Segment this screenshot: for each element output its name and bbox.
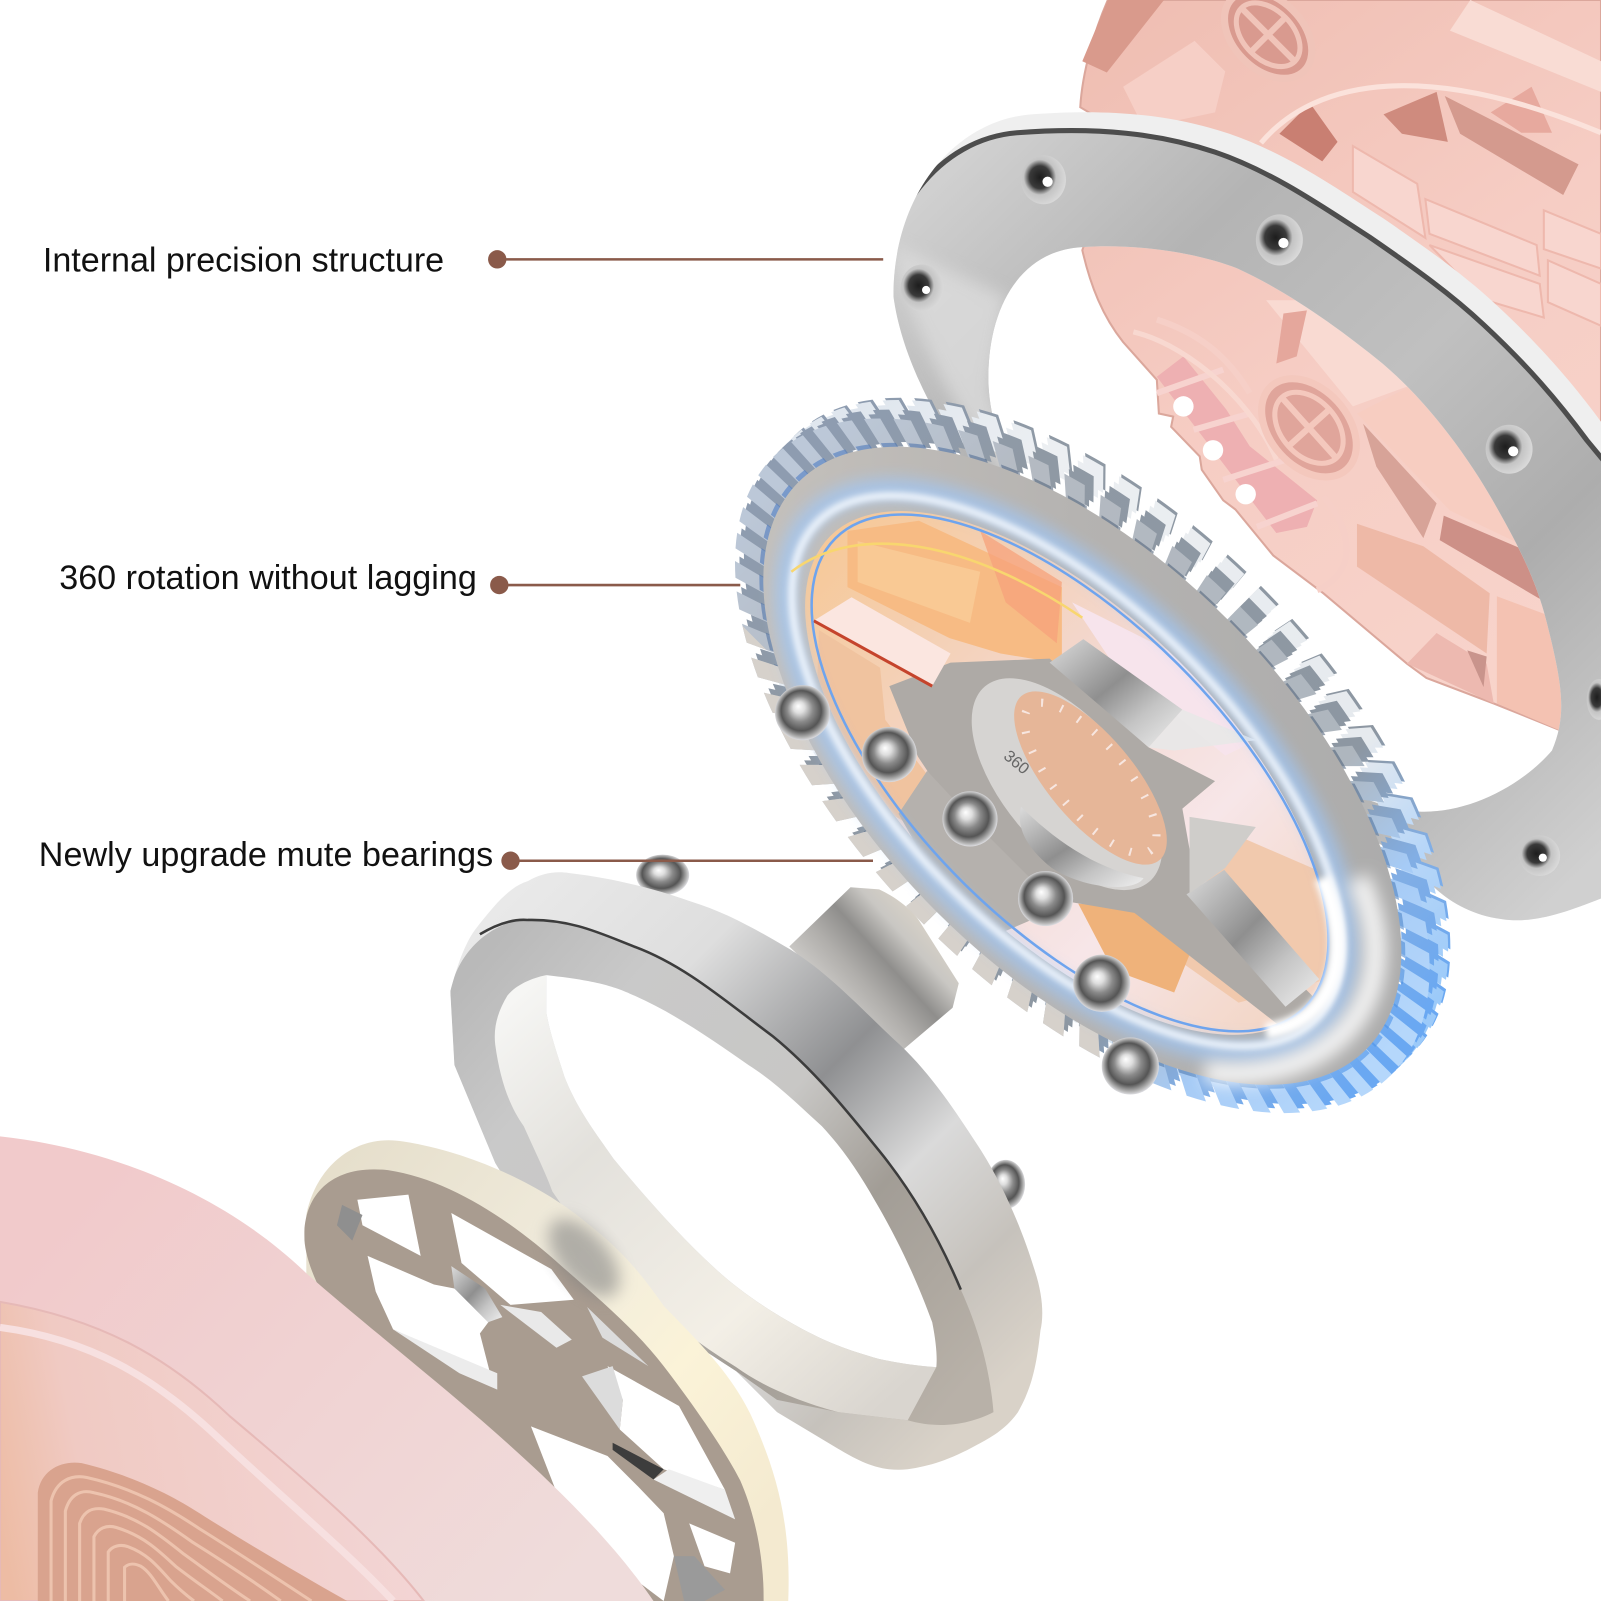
chrome block — [1186, 870, 1319, 1007]
gear marking: 360 — [1000, 747, 1033, 778]
screws — [901, 155, 1601, 876]
gear window — [805, 511, 1328, 1035]
pink ear cup — [0, 1136, 653, 1601]
bearing balls — [775, 685, 1159, 1095]
emblem upper — [1207, 0, 1329, 95]
shaft — [789, 887, 959, 1053]
disc spokes — [451, 1266, 502, 1322]
ripple pad — [38, 1463, 347, 1601]
lower-left beige teeth — [742, 626, 1114, 1058]
silver block — [1050, 639, 1182, 747]
back pink housing — [1080, 0, 1601, 737]
callout: mute bearings — [39, 836, 873, 874]
callout: internal precision structure: Internal precision structure — [43, 242, 444, 280]
hub — [889, 646, 1327, 1031]
ring hole — [546, 975, 937, 1367]
large silver ring with screws — [864, 102, 1601, 939]
ring edge line — [480, 920, 961, 1290]
callout: 360 rotation — [59, 559, 740, 597]
disc holes — [357, 1195, 735, 1601]
emblem lower — [1243, 360, 1375, 496]
front silver ring — [450, 872, 1042, 1470]
callout: internal precision structure — [43, 242, 883, 280]
callout: mute bearings: Newly upgrade mute bearings — [39, 836, 493, 874]
white block — [814, 597, 951, 686]
small balls behind front ring — [636, 855, 1025, 1209]
pink housing ribs, upper — [1082, 0, 1601, 326]
disc shading — [535, 1206, 633, 1310]
callout: 360 rotation: 360 rotation without lagging — [59, 559, 477, 597]
pink housing ribs, lower — [1133, 300, 1570, 733]
ring inner wall — [495, 975, 936, 1420]
gear body — [653, 336, 1512, 1195]
gear teeth — [735, 398, 1450, 1114]
lattice disc — [296, 1140, 789, 1601]
glow ring — [692, 395, 1442, 1146]
gear — [735, 398, 1450, 1114]
